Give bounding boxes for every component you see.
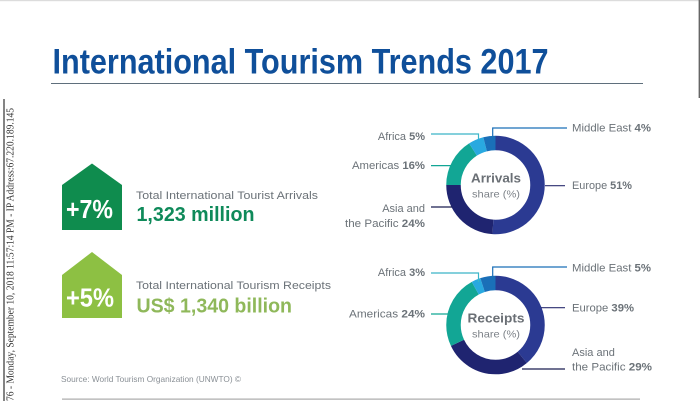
- receipts labels: the Pacific 29%: [572, 362, 652, 374]
- donut chart: receipts share: share (%): [472, 329, 520, 341]
- receipts labels: Americas 24%: [349, 309, 425, 321]
- receipts label: Total International Tourism Receipts: [136, 280, 332, 292]
- arrivals label: Total International Tourist Arrivals: [136, 190, 319, 202]
- arrivals labels: the Pacific 24%: [345, 218, 425, 230]
- source note: Source: World Tourism Organization (UNWTO) ©: [61, 374, 242, 384]
- arrivals labels: [345, 123, 651, 230]
- icon: receipts house arrow with +5%: +5%: [66, 282, 114, 312]
- receipts leader lines: [431, 267, 567, 369]
- arrivals labels: Americas 16%: [352, 160, 425, 172]
- panel: tourism receipts: [62, 252, 332, 318]
- receipts labels: Africa 3%: [378, 267, 425, 279]
- arrivals value: 1,323 million: [136, 203, 254, 226]
- arrivals leader lines: [431, 128, 567, 207]
- donut chart: receipts share: [349, 263, 652, 374]
- receipts labels: Asia and: [572, 347, 615, 359]
- donut chart: receipts share: Receipts: [468, 311, 524, 326]
- panel: tourist arrivals: [62, 164, 319, 230]
- icon: arrivals house arrow with +7%: +7%: [66, 194, 113, 224]
- donut chart: arrivals share: Arrivals: [471, 171, 521, 186]
- arrivals labels: Middle East 4%: [572, 123, 651, 135]
- donut chart: arrivals share: [345, 123, 651, 230]
- arrivals labels: Asia and: [382, 203, 425, 215]
- icon: receipts house arrow with +5%: [62, 252, 122, 318]
- arrivals labels: Africa 5%: [378, 131, 425, 143]
- title: International Tourism Trends 2017: [52, 42, 548, 81]
- margin stamp text: 76 - Monday, September 10, 2018 11:57:14 PM - IP Address:67.220.189.145: [6, 108, 16, 401]
- receipts labels: Europe 39%: [572, 303, 634, 315]
- receipts labels: Middle East 5%: [572, 263, 651, 275]
- donut chart: arrivals share: share (%): [472, 189, 520, 201]
- receipts labels: [349, 263, 652, 374]
- arrivals labels: Europe 51%: [572, 180, 632, 192]
- receipts value: US$ 1,340 billion: [136, 294, 292, 318]
- icon: arrivals house arrow with +7%: [62, 164, 122, 230]
